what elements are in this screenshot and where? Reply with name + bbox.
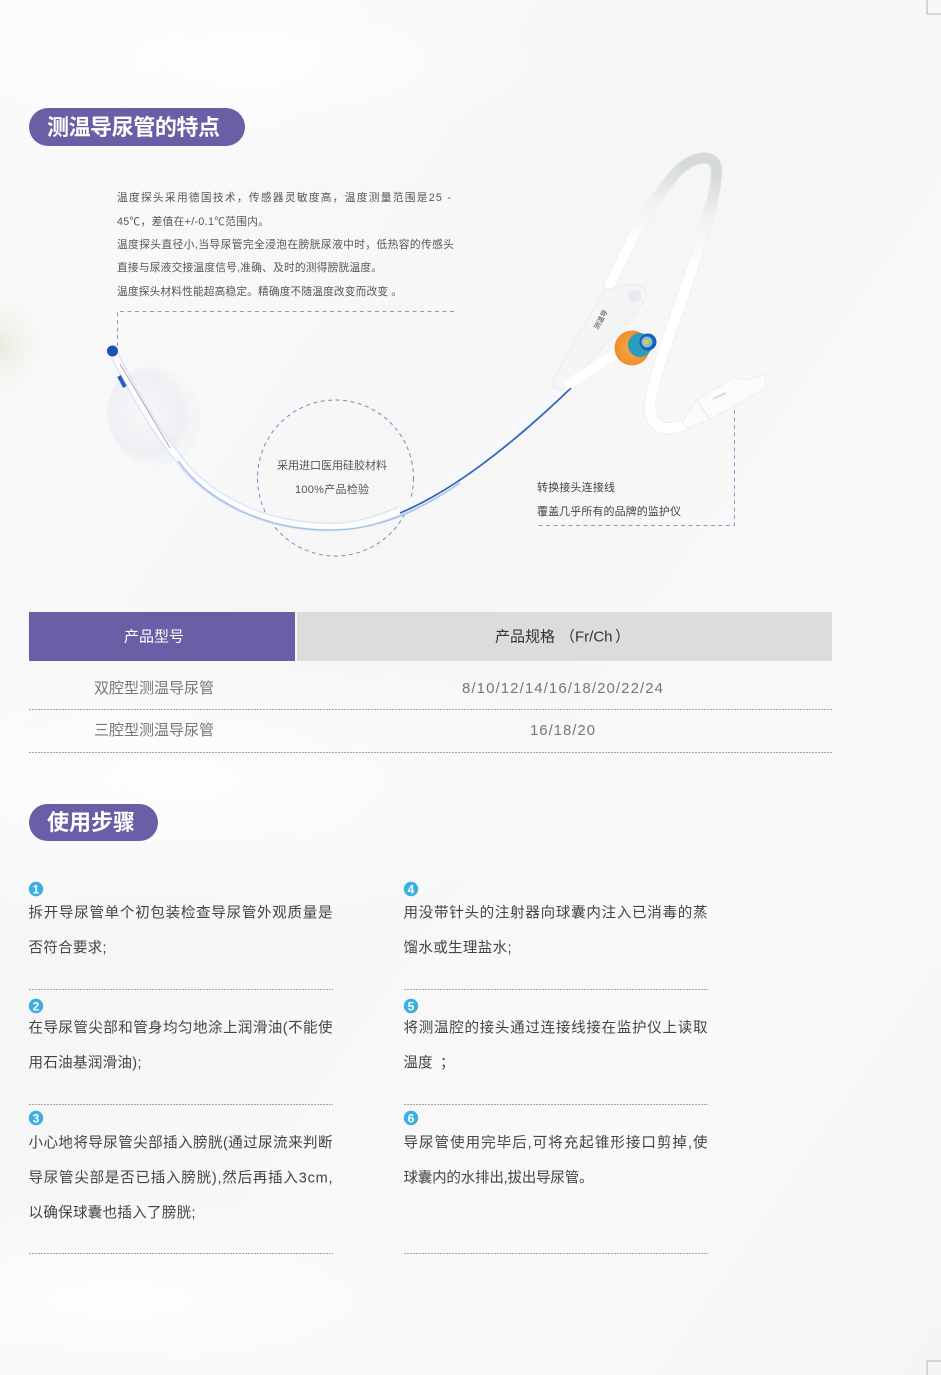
balloon (91, 351, 217, 481)
step 1 (28, 882, 332, 956)
table row: triple lumen: 三腔型测温导尿管 (94, 722, 214, 739)
step 4 (404, 882, 708, 956)
text block: temperature probe features: 45℃，差值在+/-0.1℃范围内。 (117, 215, 269, 228)
catheter tip (107, 346, 118, 356)
text block: temperature probe features: 温度探头采用德国技术，传感器灵敏度高，温度测量范围是25 - (117, 191, 451, 204)
step 3 (28, 1111, 332, 1222)
text block: temperature probe features: 直接与尿液交接温度信号,准确、及时的测得膀胱温度。 (117, 261, 382, 274)
text block: connector description: 覆盖几乎所有的品牌的监护仪 (537, 504, 681, 518)
table header: specification: （ (560, 628, 575, 646)
step 4: 4 (408, 882, 415, 896)
step 3: 3 (33, 1112, 40, 1126)
Y hub (552, 284, 646, 389)
table header: specification: Fr/Ch (575, 628, 612, 646)
table header: model: 产品型号 (124, 628, 184, 646)
step 4: 用没带针头的注射器向球囊内注入已消毒的蒸 (404, 904, 708, 922)
step 5: 温度 (404, 1054, 432, 1072)
table header: specification (297, 612, 832, 661)
callout circle: silicone material (258, 400, 414, 556)
step 3: 小心地将导尿管尖部插入膀胱(通过尿流来判断 (28, 1134, 332, 1152)
callout line: probe text to catheter tip (118, 312, 454, 346)
table header: model (29, 612, 295, 661)
table row: dual lumen (94, 680, 663, 697)
heading: 测温导尿管的特点 (29, 108, 245, 146)
step 1: 1 (33, 882, 40, 896)
illustration: temperature catheter (91, 158, 766, 530)
table header: specification: ） (615, 628, 630, 646)
heading: 使用步骤 (29, 804, 158, 841)
upper catheter tube (610, 158, 717, 428)
step 2: 2 (33, 1000, 40, 1014)
main catheter shaft (113, 352, 565, 527)
table row: dual lumen: 双腔型测温导尿管 (94, 680, 214, 697)
table row: dual lumen: 8/10/12/14/16/18/20/22/24 (462, 680, 663, 697)
step 6: 6 (408, 1112, 415, 1126)
step 6: 导尿管使用完毕后,可将充起锥形接口剪掉,使 (404, 1134, 708, 1152)
table row: triple lumen: 16/18/20 (530, 722, 595, 739)
step 6 (404, 1111, 708, 1186)
connector plug (682, 375, 766, 428)
step 1: 否符合要求; (28, 940, 106, 956)
step 4: 馏水或生理盐水; (404, 940, 512, 956)
step 2: 在导尿管尖部和管身均匀地涂上润滑油(不能使 (28, 1020, 333, 1036)
text block: temperature probe features: 温度探头材料性能超高稳定。精确度不随温度改变而改变 。 (117, 285, 402, 298)
step 2 (28, 999, 333, 1072)
heading: 测温导尿管的特点: 测温导尿管的特点 (47, 115, 220, 140)
text block: temperature probe features: 温度探头直径小,当导尿管完全浸泡在膀胱尿液中时，低热容的传感头 (117, 238, 454, 251)
table header: specification: 产品规格 (495, 628, 555, 646)
table row: triple lumen (94, 722, 595, 739)
step 5: 5 (408, 1000, 415, 1014)
table: product specifications (29, 612, 832, 752)
text block: connector description (537, 480, 681, 518)
step 2: 用石油基润滑油); (28, 1054, 142, 1072)
callout line: connector to label (537, 410, 734, 526)
step 1: 拆开导尿管单个初包装检查导尿管外观质量是 (28, 904, 332, 922)
heading: 使用步骤: 使用步骤 (47, 810, 135, 835)
text block: connector description: 转换接头连接线 (537, 480, 615, 494)
step 3: 导尿管尖部是否已插入膀胱),然后再插入3cm, (28, 1170, 332, 1186)
step 5: ； (440, 1056, 454, 1072)
orange connector cap (614, 330, 656, 366)
step 5 (404, 999, 708, 1072)
text block: temperature probe features (117, 191, 454, 298)
step 6: 球囊内的水排出,拔出导尿管。 (404, 1170, 594, 1186)
callout circle: silicone material: 采用进口医用硅胶材料 (277, 458, 387, 472)
step 3: 以确保球囊也插入了膀胱; (28, 1204, 196, 1222)
illustration: temperature catheter: 测温导 (592, 308, 610, 331)
step 5: 将测温腔的接头通过连接线接在监护仪上读取 (404, 1020, 708, 1036)
callout circle: silicone material: 100%产品检验 (295, 482, 369, 496)
